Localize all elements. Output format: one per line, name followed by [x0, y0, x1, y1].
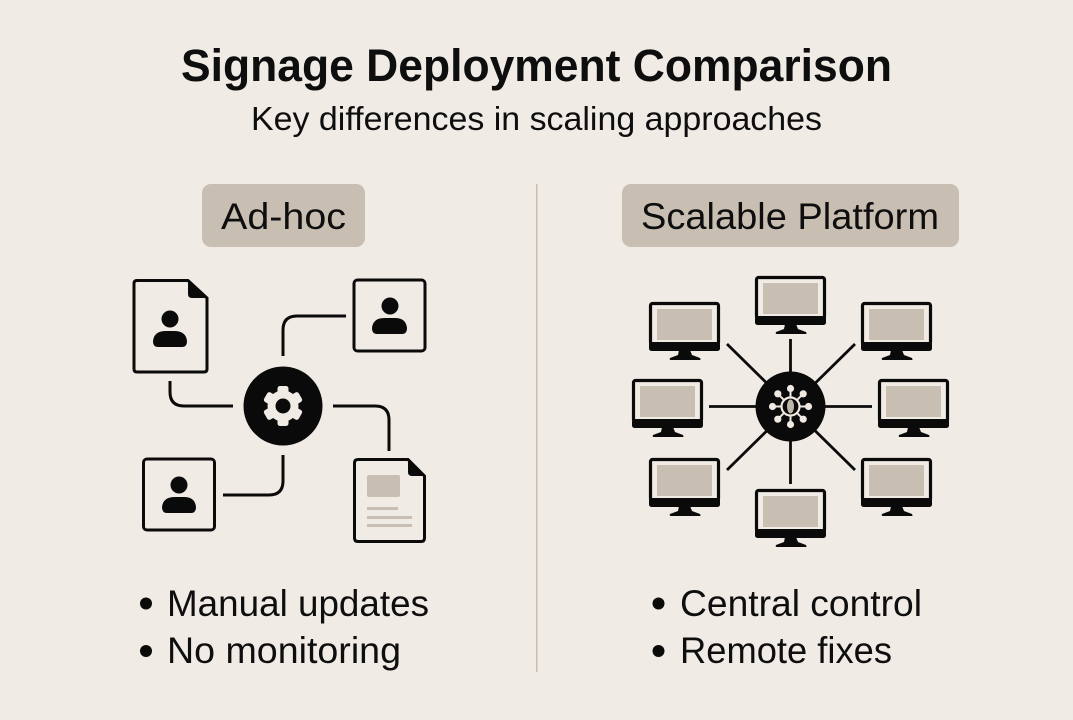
monitors	[632, 278, 949, 547]
icon: network hub	[756, 372, 826, 442]
bullet list: Ad-hoc	[140, 583, 429, 671]
bullet list: Scalable Platform: Central control	[680, 583, 922, 624]
icon: central gear	[244, 366, 322, 446]
icon: content document	[354, 458, 426, 542]
heading pill: Scalable Platform	[622, 184, 959, 247]
ad-hoc diagram	[134, 279, 426, 542]
subtitle: Key differences in scaling approaches	[251, 100, 822, 137]
bullet list: Scalable Platform	[652, 583, 922, 671]
icon: user card bottom left	[144, 459, 214, 530]
scalable platform diagram	[632, 278, 949, 547]
heading pill: Scalable Platform: Scalable Platform	[641, 196, 939, 237]
icon: user card top right	[354, 280, 425, 351]
title: Signage Deployment Comparison	[181, 40, 892, 91]
heading pill: Ad-hoc	[202, 184, 365, 247]
bullet list: Ad-hoc: No monitoring	[167, 630, 401, 671]
bullet list: Ad-hoc: Manual updates	[167, 583, 429, 624]
divider between columns	[536, 184, 538, 672]
heading pill: Ad-hoc: Ad-hoc	[221, 196, 346, 237]
connector lines	[170, 316, 389, 495]
hub spokes	[709, 339, 872, 484]
icon: user document	[134, 279, 208, 372]
bullet list: Scalable Platform: Remote fixes	[680, 630, 892, 671]
